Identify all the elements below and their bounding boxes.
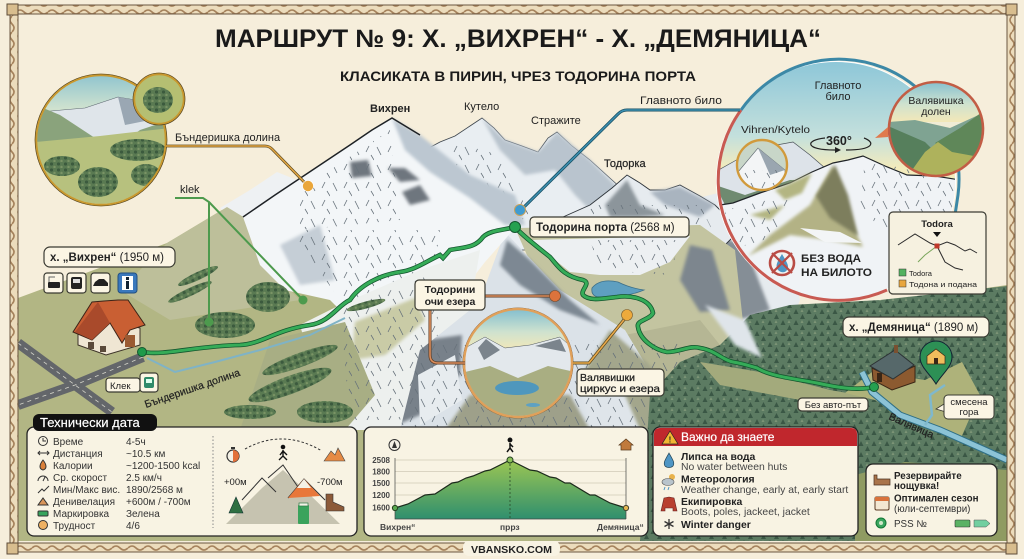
data table: Дистанция xyxy=(53,449,103,460)
chart grid and axis labels: 1500 xyxy=(372,479,391,488)
x-axis labels xyxy=(380,522,644,532)
callout: klek xyxy=(175,184,308,326)
red header: Важно да знаете xyxy=(681,430,775,444)
peak labels: Кутело xyxy=(464,101,499,113)
Todorka ridge xyxy=(563,174,732,244)
peak labels: Тодорка xyxy=(604,158,646,170)
inset panel: Todora: Тодона и подана xyxy=(909,280,978,289)
hut clearing xyxy=(845,362,980,440)
panel heading: Технически дата xyxy=(40,415,140,430)
notes list: Boots, poles, jackeet, jacket xyxy=(681,507,810,518)
right massif below saddle xyxy=(517,225,743,378)
trail colour swatches xyxy=(955,520,990,527)
label: Klek bus stop xyxy=(106,373,158,392)
x-axis labels: пррз xyxy=(500,522,520,532)
inset panel: Todora xyxy=(889,212,986,294)
icon: water drop xyxy=(664,453,674,468)
data table: 4-5ч xyxy=(126,437,146,448)
viewpoint label: Vihren/Kytelo xyxy=(741,124,810,136)
icon: jacket xyxy=(661,497,677,511)
dashed arc arrow xyxy=(245,439,322,451)
data table: 4/6 xyxy=(126,521,140,532)
panel: reservation and season xyxy=(866,464,997,536)
red header: ! xyxy=(669,436,671,444)
title: МАРШРУТ № 9: Х. „ВИХРЕН“ - Х. „ДЕМЯНИЦА“ xyxy=(215,25,821,53)
grey central rock xyxy=(400,236,680,430)
profile area chart xyxy=(392,457,629,519)
olive slope xyxy=(120,207,300,320)
icon: bed xyxy=(874,475,890,485)
reservation text: нощувка! xyxy=(894,481,939,492)
label: hut Vihren: х. „Вихрен“ (1950 м) xyxy=(50,252,164,264)
notes list: No water between huts xyxy=(681,462,787,473)
lower snowy slopes under route xyxy=(240,250,480,430)
map label: Valyavitsa river: Валявица xyxy=(887,411,936,441)
data table: Ср. скорост xyxy=(53,473,108,484)
label: hut Demyanitsa: х. „Демяница“ (1890 м) xyxy=(849,322,978,334)
label: hut Vihren xyxy=(44,247,175,267)
chart grid and axis labels xyxy=(372,456,626,512)
icon: trail marker ring xyxy=(876,518,886,528)
data table: Денивелация xyxy=(53,497,115,508)
reservation text: Оптимален сезон xyxy=(894,494,979,504)
dotted divider xyxy=(212,436,214,528)
data table: Калории xyxy=(53,461,93,472)
website badge xyxy=(463,541,560,556)
left snow spur xyxy=(220,172,296,217)
icon: calendar xyxy=(875,497,889,510)
inset panel: Todora: Todora xyxy=(909,269,933,278)
snow ridge right of circle base xyxy=(703,194,800,320)
x-axis labels: Демяница“ xyxy=(597,522,644,532)
mini view: Valyavishka valley: Валявишка xyxy=(908,95,964,107)
mini view: Valyavishka valley xyxy=(875,82,985,180)
label: mixed forest xyxy=(936,395,994,419)
chart grid and axis labels: 2508 xyxy=(372,456,391,465)
callout: Valyavishki cirque xyxy=(573,310,664,396)
label: Todorina porta pass: Тодорина порта (2568 м) xyxy=(536,222,675,234)
callout: Todorini lakes: очи езера xyxy=(425,296,475,308)
small stream along route xyxy=(147,318,345,372)
data table: Време xyxy=(53,437,84,448)
data table icons xyxy=(38,436,49,530)
data table: ~10.5 км xyxy=(126,449,165,460)
elevation illustration: -700м xyxy=(317,477,343,488)
chart grid and axis labels: 1800 xyxy=(372,468,391,476)
notes list: Winter danger xyxy=(681,520,751,531)
meadow base xyxy=(18,200,1007,541)
grass strips among the forest xyxy=(700,362,870,400)
notes list: Weather change, early at, early start xyxy=(681,485,848,496)
elevation illustration xyxy=(224,465,344,524)
label: Klek bus stop: Клек xyxy=(110,381,131,392)
map label: Banderishka valley: Бъндеришка долина xyxy=(143,367,242,411)
bottom right meadow xyxy=(855,462,1007,541)
label: Todorina porta pass xyxy=(530,217,689,237)
icon: small peaks xyxy=(324,448,345,461)
chart grid and axis labels: 1600 xyxy=(372,504,391,512)
callout: klek: klek xyxy=(180,184,200,196)
no-water warning xyxy=(770,251,872,279)
icon: parking xyxy=(44,273,63,293)
back peaks Kutelo and Strazhite xyxy=(430,118,616,250)
rock on right ridge xyxy=(726,240,772,320)
peak labels: Стражите xyxy=(531,115,581,127)
x-axis labels: Вихрен“ xyxy=(380,522,415,532)
notes list xyxy=(681,452,848,531)
inset panel: Todora: Todora xyxy=(921,219,953,230)
360 rotation icon xyxy=(811,134,871,153)
callout: Banderishka valley: Бъндеришка долина xyxy=(175,132,281,144)
mixed forest right xyxy=(640,286,1007,541)
transport icons xyxy=(44,273,137,293)
reservation text: Резервирайте xyxy=(894,471,962,482)
icon: walker xyxy=(507,438,513,452)
icon: map pin xyxy=(920,341,952,384)
icon: bus xyxy=(67,273,86,293)
ridge heading: Главното xyxy=(815,80,861,92)
main ridge leader line: Главното било xyxy=(640,95,722,107)
website badge: VBANSKO.COM xyxy=(471,544,552,556)
no-water warning: БЕЗ ВОДА xyxy=(801,253,861,265)
Todorini lake xyxy=(592,281,644,298)
data table: Зелена xyxy=(126,509,160,520)
icon: hut Vihren xyxy=(73,300,145,355)
notes list: Екипировка xyxy=(681,497,742,508)
roads xyxy=(18,343,143,412)
data table: ~1200-1500 kcal xyxy=(126,461,200,472)
label: mixed forest: смесена xyxy=(950,397,988,408)
data table: Маркировка xyxy=(53,509,110,520)
360 rotation icon: 360° xyxy=(826,134,852,148)
main ridge leader line xyxy=(514,95,740,216)
reservation text: PSS № xyxy=(894,519,927,530)
elevation illustration: +00м xyxy=(224,477,247,488)
peak labels xyxy=(370,101,646,170)
red header xyxy=(654,428,857,446)
big inset: main ridge: било xyxy=(825,91,851,103)
icon: compass xyxy=(389,440,400,450)
icon: hiker xyxy=(279,445,287,460)
icon: snowflake xyxy=(664,519,674,529)
big inset: main ridge xyxy=(700,59,985,310)
callout: Banderishka valley xyxy=(166,132,314,192)
label: mixed forest: гора xyxy=(959,407,979,418)
mini view: Valyavishka valley: долен xyxy=(921,106,951,118)
Valyavitsa river xyxy=(862,372,1007,460)
data table: 2.5 км/ч xyxy=(126,473,162,484)
notes list: Метеорология xyxy=(681,474,755,486)
panel: technical data xyxy=(27,414,357,536)
reservation text xyxy=(894,471,979,530)
landscape map xyxy=(18,118,1007,541)
subtitle: КЛАСИКАТА В ПИРИН, ЧРЕЗ ТОДОРИНА ПОРТА xyxy=(340,68,696,84)
peak labels: Вихрен xyxy=(370,103,410,115)
chart grid and axis labels: 1200 xyxy=(372,491,391,500)
panel: important notes xyxy=(653,427,858,536)
Vihren massif xyxy=(242,117,526,306)
label: no car road xyxy=(798,398,868,411)
data table: Трудност xyxy=(53,521,96,532)
callout: Todorini lakes xyxy=(415,280,560,363)
no-water warning: НА БИЛОТО xyxy=(801,267,872,279)
icon: hut xyxy=(619,439,633,450)
panel: elevation profile xyxy=(364,427,648,536)
callout: Todorini lakes: Тодорини xyxy=(425,284,475,296)
lake inset xyxy=(463,308,575,420)
data table xyxy=(53,437,200,532)
snow gully xyxy=(705,305,762,358)
pine scrub patches xyxy=(167,263,386,423)
label: no car road: Без авто-път xyxy=(805,400,862,411)
icon: hut Demyanitsa xyxy=(870,345,915,390)
icon: info xyxy=(118,273,137,293)
notes list: Липса на вода xyxy=(681,452,756,463)
green route line xyxy=(138,222,878,392)
left inset: Banderishka valley xyxy=(30,70,185,210)
data table: +600м / -700м xyxy=(126,497,191,508)
icon: stopwatch xyxy=(227,447,239,462)
reservation text: (юли-септември) xyxy=(894,504,970,515)
mini view: Vihren xyxy=(735,140,790,195)
icon: car xyxy=(91,273,110,293)
callout: Valyavishki cirque: Валявишки xyxy=(580,372,635,384)
data table: 1890/2568 м xyxy=(126,485,183,496)
data table: Мин/Макс вис. xyxy=(53,485,120,496)
callout: Valyavishki cirque: циркус и езера xyxy=(580,383,660,395)
icon: weather xyxy=(662,474,675,490)
label: hut Demyanitsa xyxy=(843,317,989,337)
